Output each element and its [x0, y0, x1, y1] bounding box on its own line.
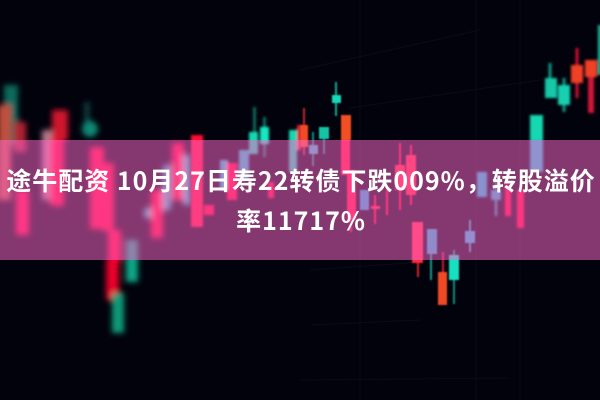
candles: far left blurred cluster — [0, 85, 191, 333]
title — [6, 162, 596, 238]
title: 途牛配资 10月27日寿22转债下跌009%，转股溢价 — [6, 162, 596, 198]
candles: far right cluster — [477, 25, 600, 228]
translucent title band — [0, 140, 600, 260]
title: 率11717% — [236, 202, 366, 238]
candles: middle cluster — [191, 107, 301, 227]
candles: centre-right cluster — [300, 82, 475, 305]
